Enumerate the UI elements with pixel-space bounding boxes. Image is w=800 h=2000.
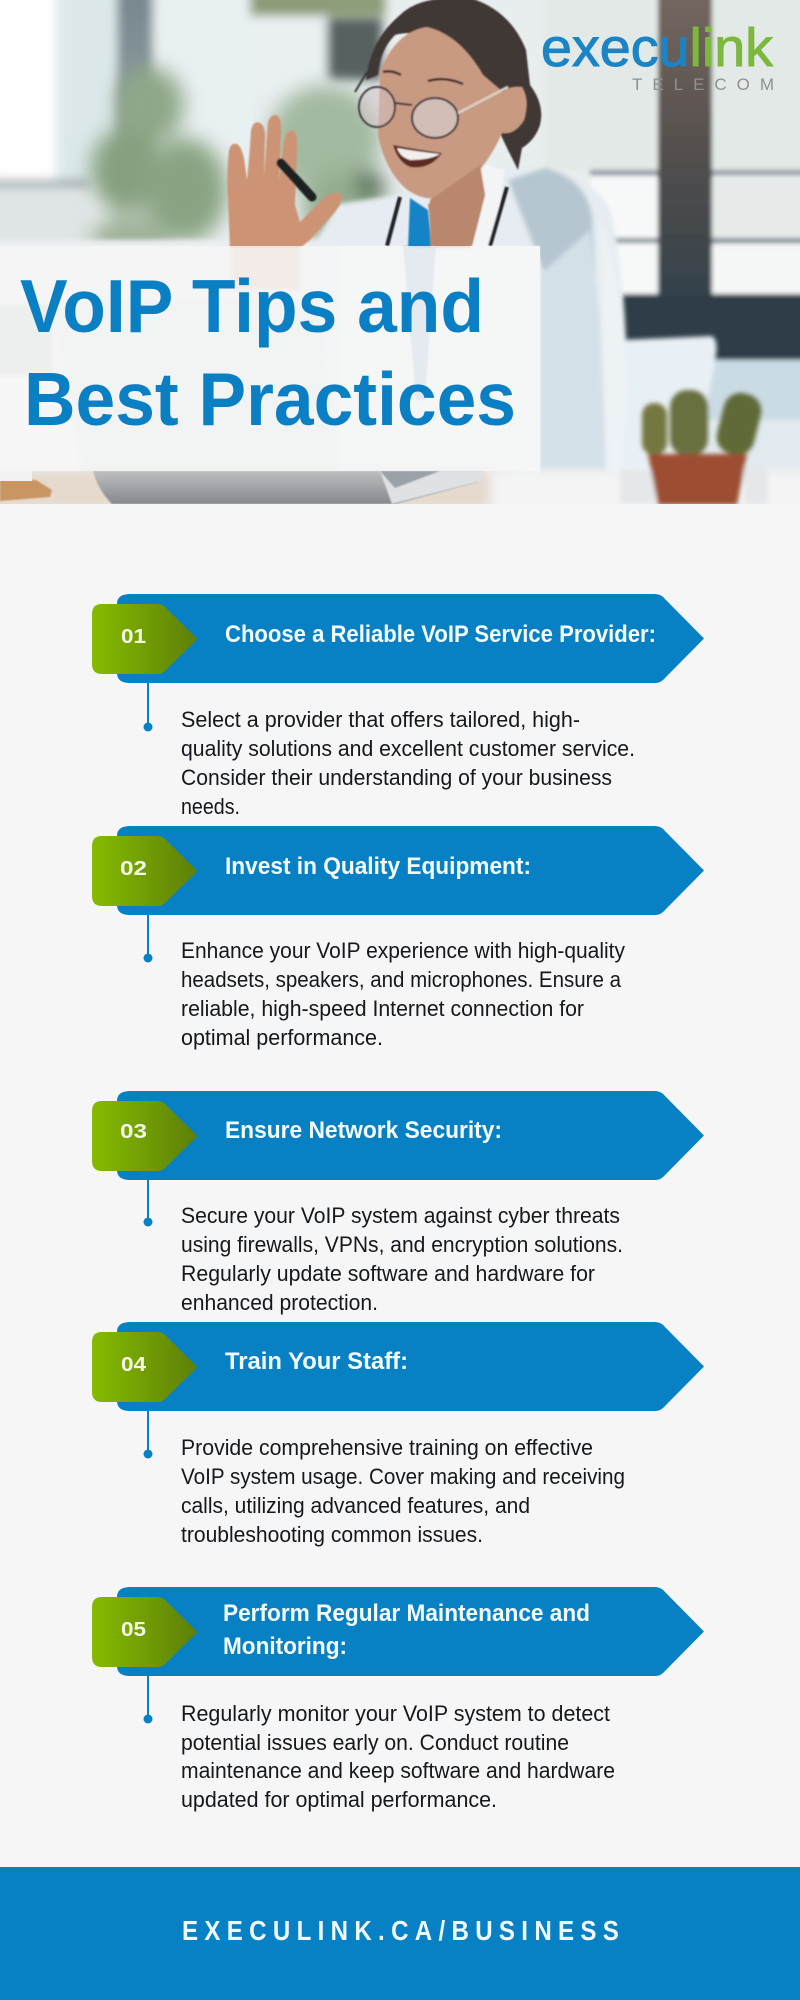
body 01 [181,707,635,819]
body 03 [181,1203,623,1315]
title: Best Practices [24,357,516,441]
banner 05 [117,1587,704,1676]
plants [90,67,387,265]
heading 03: Ensure Network Security: [225,1117,502,1144]
badge 04: 04 [121,1354,147,1376]
body 03: Secure your VoIP system against cyber threats [181,1203,620,1228]
body 03: enhanced protection. [181,1290,378,1315]
body 02: optimal performance. [181,1025,383,1050]
banner 03 [117,1091,704,1180]
body 04: troubleshooting common issues. [181,1522,483,1547]
body 03: using firewalls, VPNs, and encryption solutions. [181,1232,623,1257]
badge 03: 03 [120,1121,147,1143]
window frames on the right [588,0,800,423]
title [20,264,516,441]
body 02: reliable, high-speed Internet connection for [181,996,584,1021]
body 04 [181,1435,625,1547]
banner 02 [117,826,704,915]
footer url: EXECULINK.CA/BUSINESS [182,1914,619,1946]
heading 05: Perform Regular Maintenance and [223,1600,590,1627]
tip 03 [92,1091,704,1315]
title panel [0,246,540,471]
coat and chair [312,165,716,476]
badge 05 [92,1597,198,1667]
banner 01 [117,594,704,683]
body 03: Regularly update software and hardware for [181,1261,595,1286]
timeline 05 [144,1676,152,1724]
timeline 02 [144,915,152,962]
body 01: needs. [181,794,240,819]
logo: Execulink Telecom: TELECOM [632,75,774,94]
desk, laptop base, book, cactus [0,389,800,512]
heading 04: Train Your Staff: [225,1348,408,1375]
body 02 [181,938,625,1050]
body 04: Provide comprehensive training on effective [181,1435,593,1460]
badge 04 [92,1332,198,1402]
person: hair, face, glasses, mouth [355,0,541,246]
logo: Execulink Telecom: execulink [541,18,774,78]
heading 05: Monitoring: [223,1633,347,1660]
body 05: maintenance and keep software and hardware [181,1758,615,1783]
body 01: Consider their understanding of your business [181,765,612,790]
title: VoIP Tips and [20,264,484,348]
heading 02: Invest in Quality Equipment: [225,853,531,880]
badge 01: 01 [121,626,146,648]
tip 04 [92,1322,704,1547]
badge 05: 05 [121,1619,146,1641]
timeline 01 [144,683,152,732]
body 02: Enhance your VoIP experience with high-quality [181,938,625,963]
heading 05 [223,1600,590,1660]
timeline 03 [144,1180,152,1226]
body 05: updated for optimal performance. [181,1787,497,1812]
badge 02: 02 [120,858,147,880]
tip 05 [92,1587,704,1812]
body 05 [181,1701,615,1812]
header photo: doctor waving at laptop [0,0,800,512]
hand with pen [227,115,342,248]
body 05: potential issues early on. Conduct routine [181,1730,569,1755]
body 05: Regularly monitor your VoIP system to detect [181,1701,610,1726]
body 04: calls, utilizing advanced features, and [181,1493,530,1518]
body 02: headsets, speakers, and microphones. Ensure a [181,967,622,992]
badge 01 [92,604,198,674]
laptop lid and background under the panel [0,237,318,288]
badge 02 [92,836,198,906]
body 04: VoIP system usage. Cover making and receiving [181,1464,625,1489]
tip 02 [92,826,704,1050]
heading 01: Choose a Reliable VoIP Service Provider: [225,621,656,648]
badge 03 [92,1101,198,1171]
timeline 04 [144,1411,152,1458]
banner 04 [117,1322,704,1411]
tip 01 [92,594,704,819]
body 01: quality solutions and excellent customer service. [181,736,635,761]
footer band [0,1867,800,2000]
body 01: Select a provider that offers tailored, high- [181,707,580,732]
